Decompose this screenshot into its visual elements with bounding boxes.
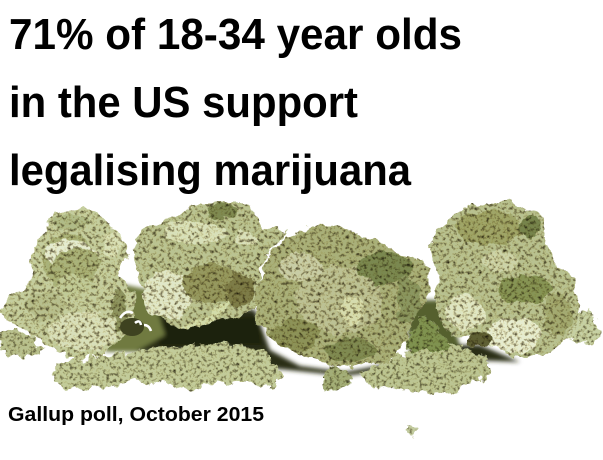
shadow and fill behind buds xyxy=(105,282,520,376)
leaf between bud 3 and bud 4 xyxy=(403,316,450,352)
bud 1 xyxy=(0,207,135,357)
bud 4 xyxy=(430,202,580,357)
title: legalising marijuana xyxy=(9,146,411,195)
bud 3 xyxy=(253,225,430,368)
image: marijuana buds xyxy=(0,202,599,435)
title xyxy=(9,10,462,195)
source note: Gallup poll, October 2015 xyxy=(8,403,264,426)
bud 2 xyxy=(133,203,287,330)
title: 71% of 18-34 year olds xyxy=(9,10,462,59)
white curl between bud 1 and bud 2 xyxy=(120,312,151,336)
title: in the US support xyxy=(9,78,358,127)
loose crumbs xyxy=(0,309,599,435)
